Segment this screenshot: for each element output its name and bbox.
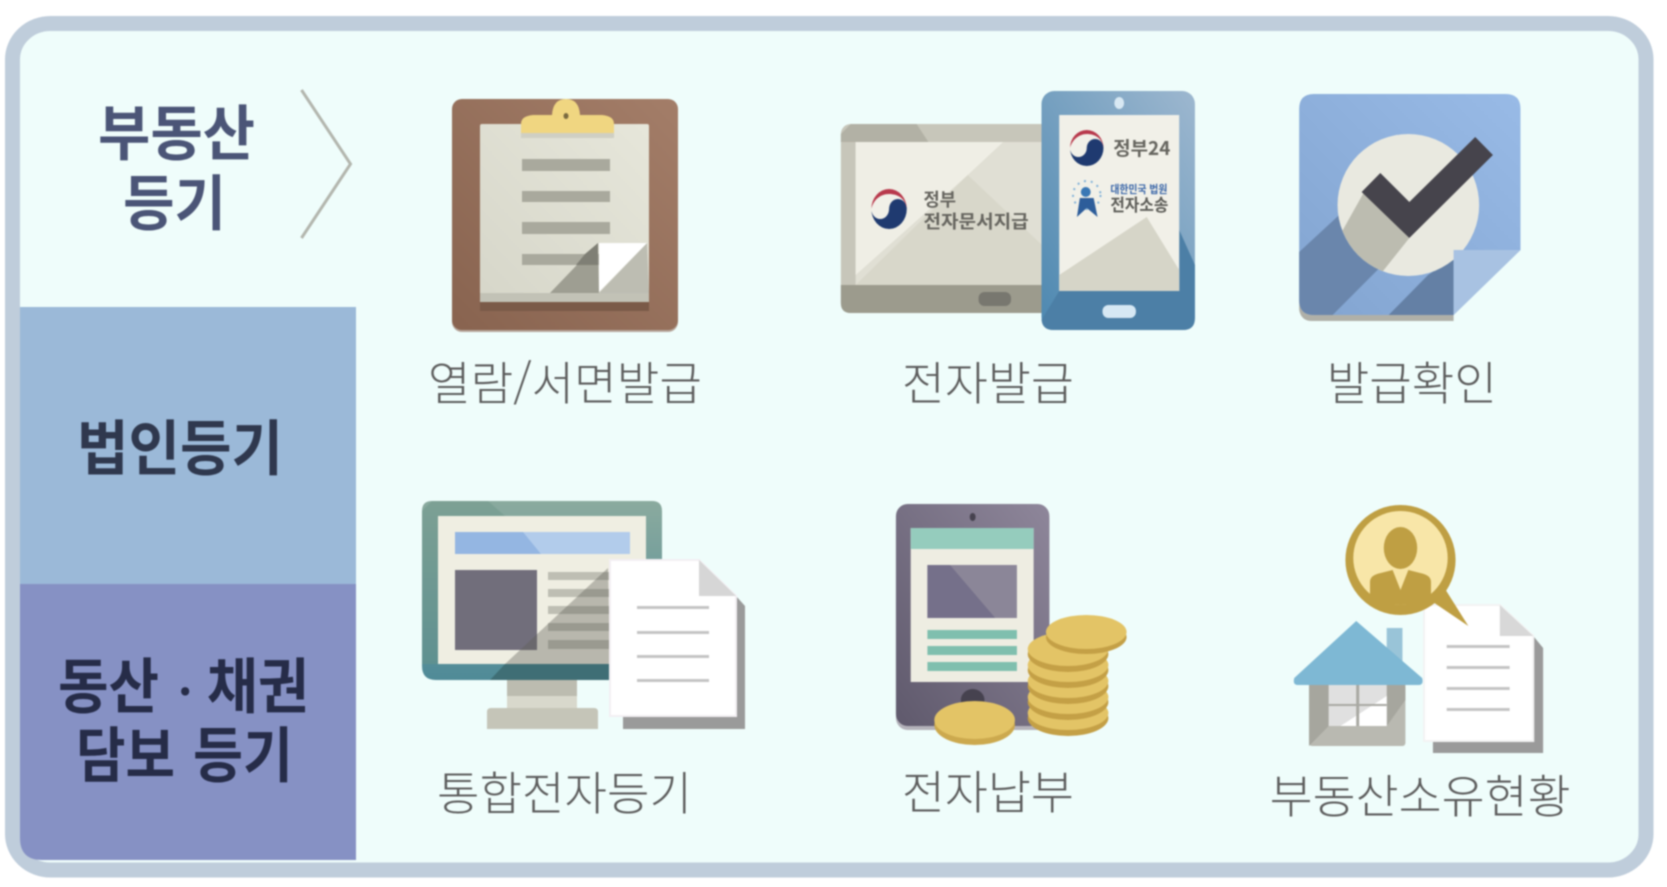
label: 전자발급: [902, 348, 1074, 414]
label: 발급확인: [1327, 348, 1497, 414]
phone: [1042, 91, 1195, 330]
document: [610, 560, 745, 729]
tab: 동산·채권 담보 등기: [20, 584, 356, 860]
phone: 정부24: [1113, 134, 1170, 161]
tab: 동산·채권 담보 등기: 채권: [207, 639, 309, 726]
item: 열람/서면발급: [428, 99, 702, 414]
icon: document with check mark: [1299, 94, 1520, 321]
sidebar: 부동산 등기 selected tab: [98, 86, 350, 243]
tablet: 전자문서지급: [923, 208, 1029, 234]
heading: 부동산 등기: 부동산: [98, 86, 255, 173]
phone: 대한민국 법원: [1110, 181, 1167, 197]
tab: 법인등기: [20, 307, 356, 584]
owner bubble: [1345, 505, 1468, 626]
house: [1294, 621, 1423, 746]
coin stack: [1028, 615, 1127, 736]
arrow: chevron: [302, 90, 350, 238]
icon: tablet with coins: [896, 504, 1127, 745]
icon: owner, house and document: [1294, 505, 1543, 753]
single coin: [934, 701, 1015, 745]
label: 열람/서면발급: [428, 348, 702, 414]
item: 부동산소유현황: [1270, 505, 1571, 827]
icon: monitor with document: [422, 501, 745, 729]
tab: 동산·채권 담보 등기: 담보: [76, 708, 175, 795]
tab: 동산·채권 담보 등기: ·: [178, 657, 192, 721]
heading: 부동산 등기: 등기: [123, 156, 226, 243]
heading: 부동산 등기: [98, 86, 255, 243]
document: [1424, 605, 1543, 753]
item: 통합전자등기: [422, 501, 745, 824]
tab: 동산·채권 담보 등기: 동산: [58, 639, 159, 726]
tab: 동산·채권 담보 등기: 등기: [193, 708, 293, 795]
label: 부동산소유현황: [1270, 761, 1571, 827]
phone: 전자소송: [1110, 191, 1168, 216]
label: 전자납부: [902, 757, 1074, 823]
item: 전자납부: [896, 504, 1127, 823]
tab: 법인등기: 법인등기: [77, 401, 283, 488]
item: 발급확인: [1299, 94, 1520, 414]
logo: [871, 189, 907, 229]
icon: tablet and phone: [841, 91, 1195, 330]
item: 전자발급: [841, 91, 1195, 414]
tablet: 정부: [923, 186, 956, 212]
icon: clipboard: [452, 99, 678, 332]
tablet: [841, 124, 1052, 313]
label: 통합전자등기: [437, 758, 692, 824]
